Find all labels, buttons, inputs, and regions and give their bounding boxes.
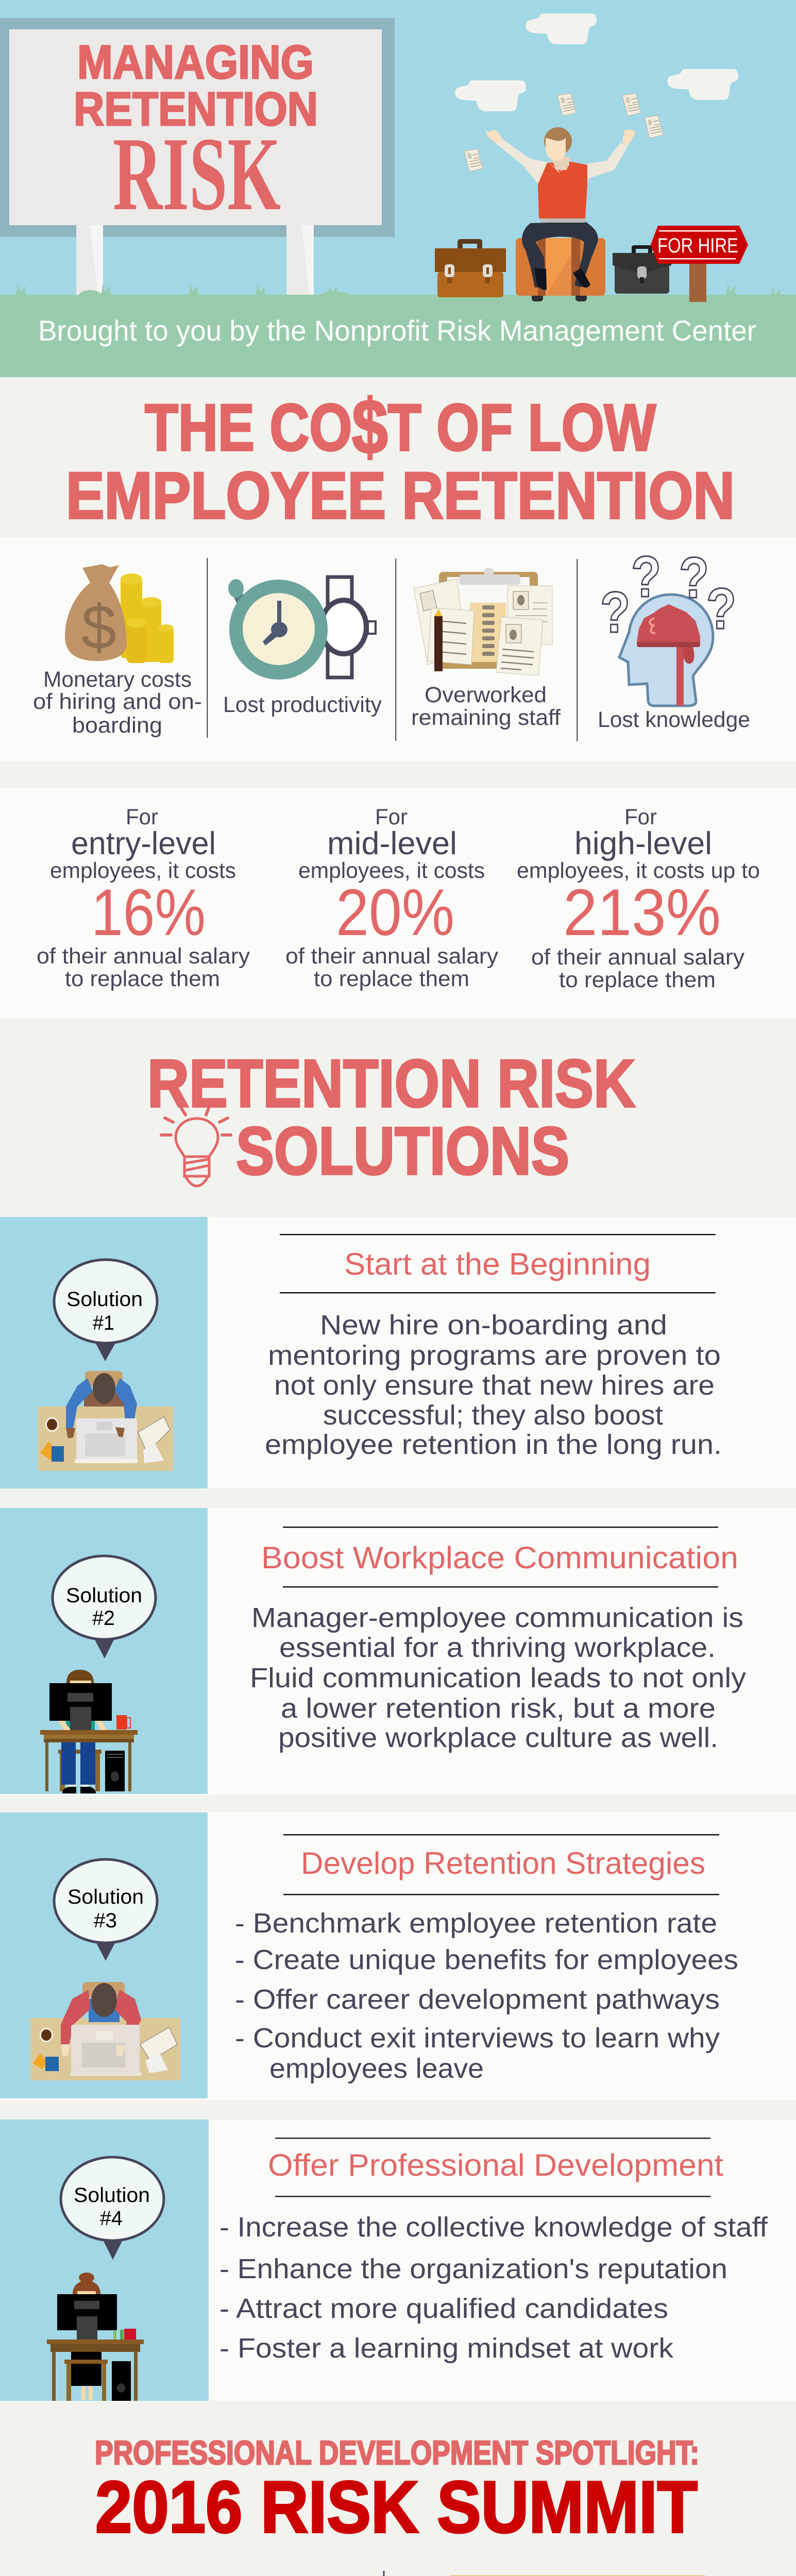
icon: head with brain and question marks: ?	[706, 577, 736, 641]
stat: mid-level: mid-level	[327, 826, 457, 861]
stat: mid-level: to replace them	[314, 967, 469, 991]
text: solution 1: Start at the Beginning	[344, 1247, 651, 1281]
speech bubble: solution 3: Solution	[67, 1886, 144, 1908]
text: solution 1: mentoring programs are proven to	[268, 1340, 721, 1371]
icon: light bulb	[161, 1108, 231, 1186]
text: solution 2: Fluid communication leads to not only	[250, 1663, 746, 1693]
stat: high-level: For	[624, 805, 657, 829]
icon: head with brain and question marks: ?	[679, 546, 709, 610]
text: overworked staff: remaining staff	[411, 705, 561, 730]
text: solution 2: positive workplace culture as well.	[278, 1722, 718, 1753]
illustration: man sitting with arms raised	[485, 127, 635, 290]
text: solution 3	[235, 1834, 738, 2084]
speech bubble: solution 1	[54, 1260, 157, 1361]
icon: head with brain and question marks: ?	[631, 545, 661, 609]
text: solution 3: employees leave	[269, 2053, 484, 2084]
panel: hero header	[0, 0, 796, 377]
text: solution 2: Boost Workplace Communication	[261, 1540, 738, 1575]
stat: entry-level: For	[126, 805, 158, 829]
illustration: person at computer	[40, 1670, 138, 1793]
text: solution 3: - Benchmark employee retention rate	[235, 1908, 717, 1939]
text: lost knowledge: Lost knowledge	[598, 707, 750, 732]
panel: summit benefits grid	[15, 2571, 777, 2576]
heading: professional development spotlight: 2016 RISK SUMMIT	[95, 2466, 698, 2548]
text: overworked staff	[411, 683, 561, 730]
title: MANAGING	[77, 36, 314, 89]
icon: clipboard and resumes	[414, 568, 552, 675]
text: solution 4: - Foster a learning mindset at work	[219, 2333, 674, 2364]
heading: the cost of low employee retention: THE CO	[145, 391, 394, 465]
panel: solution 1	[0, 1217, 796, 1488]
illustration: brown briefcase	[435, 239, 506, 297]
text: solution 2	[250, 1527, 746, 1753]
icon: money bag and coins: $	[81, 592, 116, 662]
text: monetary costs	[33, 667, 202, 738]
text: solution 3: - Create unique benefits for employees	[235, 1944, 738, 1975]
speech bubble: solution 4: Solution	[74, 2184, 150, 2207]
sign: for hire	[651, 226, 748, 302]
panel: solution 4	[0, 2120, 796, 2401]
text: solution 4: Offer Professional Development	[268, 2148, 723, 2182]
panel: cost statistics	[0, 788, 796, 1019]
grass tufts	[15, 284, 781, 301]
stat: mid-level	[285, 805, 499, 991]
speech bubble: solution 1: Solution	[66, 1288, 143, 1311]
text: solution 1: employee retention in the long run.	[265, 1429, 722, 1460]
text: solution 4: - Increase the collective knowledge of staff	[219, 2212, 768, 2243]
icon: stopwatch	[228, 577, 376, 680]
stat: entry-level: employees, it costs	[50, 858, 236, 883]
illustration: person at desk, red sweater	[30, 1982, 180, 2080]
stat: mid-level: For	[375, 805, 408, 829]
stat: high-level	[517, 805, 760, 992]
text: solution 2: Manager-employee communication is	[251, 1602, 743, 1633]
heading: the cost of low employee retention: $	[352, 383, 388, 470]
text: solution 4: - Attract more qualified candidates	[219, 2293, 668, 2324]
text: solution 1	[265, 1234, 722, 1460]
speech bubble: solution 2: Solution	[66, 1584, 142, 1607]
subtitle: Brought to you by the Nonprofit Risk Management Center	[38, 314, 756, 347]
text: lost productivity: Lost productivity	[223, 692, 382, 717]
icon: head with brain and question marks: ?	[600, 580, 630, 645]
speech bubble: solution 2	[53, 1556, 156, 1658]
stat: entry-level: of their annual salary	[37, 944, 250, 969]
stat: high-level: of their annual salary	[531, 945, 745, 970]
stat: entry-level: entry-level	[71, 826, 216, 861]
heading: retention risk solutions: RETENTION RISK	[147, 1045, 635, 1121]
sign: for hire: FOR HIRE	[657, 234, 738, 257]
panel: four costs	[0, 537, 796, 761]
title: RETENTION	[74, 83, 318, 135]
heading: the cost of low employee retention: T OF LOW	[388, 391, 656, 465]
stat: high-level: employees, it costs up to	[517, 858, 760, 883]
text: solution 2: essential for a thriving workplace.	[279, 1632, 716, 1663]
text: solution 3: - Conduct exit interviews to learn why	[235, 2023, 720, 2054]
stat: mid-level: employees, it costs	[298, 858, 485, 883]
text: solution 4	[219, 2138, 768, 2364]
text: solution 4: - Enhance the organization's reputation	[219, 2253, 727, 2284]
text: overworked staff: Overworked	[425, 683, 547, 707]
illustration: woman at computer	[47, 2273, 144, 2401]
heading: professional development spotlight	[95, 2434, 699, 2548]
stat: entry-level	[37, 805, 250, 991]
stat: mid-level: of their annual salary	[285, 944, 499, 969]
heading: retention risk solutions	[147, 1045, 635, 1189]
stat: high-level: 213%	[563, 876, 721, 950]
stat: mid-level: 20%	[336, 876, 454, 950]
speech bubble: solution 3: #3	[94, 1909, 117, 1932]
illustration: presenter with chart	[445, 2575, 710, 2576]
speech bubble: solution 3	[54, 1859, 157, 1961]
icon: head with brain and question marks	[600, 545, 736, 706]
title	[74, 36, 318, 232]
illustration: orange suitcase	[516, 238, 605, 301]
heading: retention risk solutions: SOLUTIONS	[236, 1113, 569, 1189]
icon: flying resumes	[464, 93, 663, 172]
text: solution 3: - Offer career development pathways	[235, 1984, 720, 2015]
stat: high-level: to replace them	[559, 968, 716, 992]
speech bubble: solution 4	[61, 2157, 164, 2260]
illustration: black briefcase	[613, 245, 671, 294]
title: RISK	[113, 116, 281, 232]
text: solution 1: successful; they also boost	[323, 1400, 663, 1431]
stat: high-level: high-level	[574, 826, 712, 861]
heading: the cost of low employee retention	[66, 383, 735, 533]
text: monetary costs: Monetary costs	[43, 667, 192, 692]
text: monetary costs: of hiring and on-	[33, 689, 202, 714]
illustration: person at desk, top view	[38, 1371, 173, 1471]
icon: money bag and coins	[65, 564, 174, 663]
speech bubble: solution 1: #1	[93, 1312, 114, 1334]
text: monetary costs: boarding	[72, 713, 162, 738]
stat: entry-level: to replace them	[65, 967, 220, 991]
panel: solution 3	[0, 1812, 796, 2100]
stat: entry-level: 16%	[91, 876, 206, 950]
speech bubble: solution 2: #2	[92, 1607, 115, 1630]
speech bubble: solution 4: #4	[100, 2207, 123, 2230]
text: solution 3: Develop Retention Strategies	[301, 1846, 705, 1880]
clouds	[455, 13, 738, 111]
text: solution 1: not only ensure that new hires are	[274, 1370, 715, 1401]
text: solution 2: a lower retention risk, but a more	[281, 1693, 716, 1724]
text: solution 1: New hire on-boarding and	[320, 1310, 667, 1341]
panel: solution 2	[0, 1508, 796, 1795]
billboard with title	[0, 18, 395, 295]
